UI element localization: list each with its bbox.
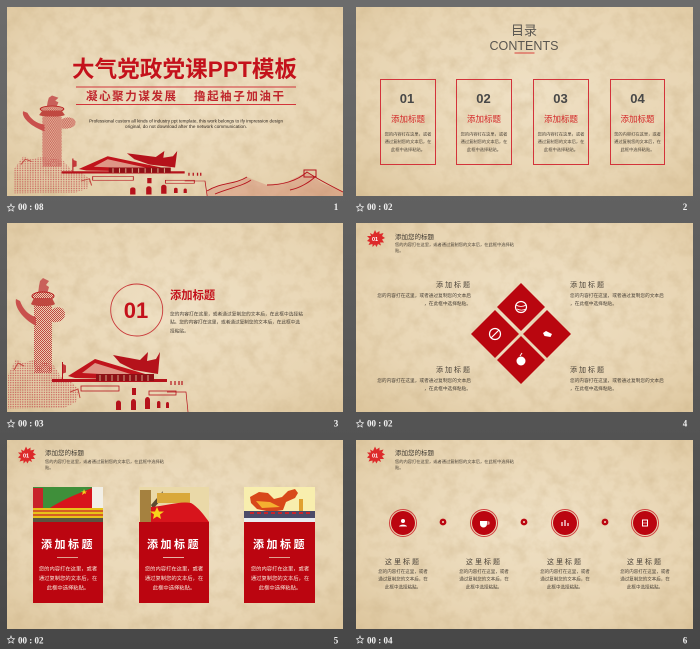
connector dot 2 <box>521 519 527 525</box>
section body text <box>170 310 303 334</box>
paper background <box>7 440 343 629</box>
card text: 通过复制您的文本后，在 <box>145 574 203 582</box>
card 2 <box>139 487 209 603</box>
timeline node 4: calendar icon <box>632 510 658 536</box>
footer 4: 00 : 02 <box>367 418 393 428</box>
card text: 您的内容打在这里，或者 <box>251 564 309 572</box>
text block top left: 您的内容打在这里，或者通过复制您的文本后 <box>377 292 471 299</box>
card 1 <box>33 487 103 603</box>
header text <box>395 232 515 254</box>
timeline node 2: cup icon <box>470 510 498 536</box>
section heading: 添加标题 <box>170 288 215 302</box>
footer 1 <box>8 202 339 212</box>
text block 4: 通过复制您的文本后，在 <box>620 576 670 582</box>
header badge: 01 <box>23 454 29 460</box>
photo: map of China and crowd <box>244 487 315 522</box>
text block top left: ，在此框中选择粘贴。 <box>424 300 471 307</box>
text block 1 <box>378 557 428 590</box>
footer 2 <box>356 202 688 212</box>
text block 1: 您的内容打在这里，或者 <box>378 568 428 575</box>
footer 2: 2 <box>683 202 688 212</box>
diamond top: ball icon <box>497 283 545 331</box>
footer 1: 00 : 08 <box>18 202 44 212</box>
paper background <box>356 440 693 629</box>
card 03: 添加标题 <box>544 114 578 124</box>
section body text: 择粘贴。 <box>170 328 189 334</box>
card 04: 添加标题 <box>620 114 655 124</box>
card 04 <box>610 80 664 164</box>
slide 1: cover <box>7 7 343 212</box>
subtitle band <box>76 87 296 104</box>
text block 3 <box>540 557 590 590</box>
footer 6: 6 <box>683 636 688 646</box>
paper background <box>7 223 343 412</box>
card 04: 通过复制您的文本后，在 <box>614 138 661 145</box>
card text <box>39 564 97 592</box>
header text: 贴。 <box>45 464 54 471</box>
text block bottom left <box>377 365 472 392</box>
text block top right <box>570 280 664 307</box>
footer 5: 00 : 02 <box>18 636 44 646</box>
card text: 通过复制您的文本后，在 <box>251 574 309 582</box>
text block bottom left: 您的内容打在这里，或者通过复制您的文本后 <box>377 377 471 384</box>
card text <box>251 564 309 592</box>
text block 1: 此框中选择粘贴。 <box>385 584 421 590</box>
card 03: 此框中选择粘贴。 <box>544 146 578 153</box>
divider <box>269 556 290 559</box>
timeline node 1: person icon <box>390 510 416 536</box>
slide 5: three photo cards <box>7 440 343 646</box>
text block top left: 添加标题 <box>436 280 472 289</box>
header badge <box>367 230 385 247</box>
card 03: 您的内容打在这里，或者 <box>538 130 585 138</box>
text block 2 <box>459 557 509 590</box>
footer 2: 00 : 02 <box>367 202 393 212</box>
footer 4: 4 <box>683 418 688 428</box>
text block 1: 通过复制您的文本后，在 <box>378 576 428 582</box>
header badge: 01 <box>372 237 378 243</box>
footer 6 <box>356 636 688 646</box>
diamond left: no-symbol icon <box>471 310 519 358</box>
section body text: 您的内容打在这里，或者通过复制您的文本后，在此框中选择粘 <box>170 310 303 318</box>
card text: 通过复制您的文本后，在 <box>39 574 97 582</box>
footer 6: 00 : 04 <box>367 636 393 646</box>
card 02 <box>456 80 512 164</box>
header text: 添加您的标题 <box>45 448 84 457</box>
header badge <box>367 446 385 464</box>
header text <box>395 448 515 471</box>
text block 4: 这里标题 <box>627 557 663 566</box>
card title: 添加标题 <box>253 537 307 551</box>
slide 2: contents <box>356 7 693 212</box>
contents heading <box>490 23 558 54</box>
slide 6: timeline <box>356 440 693 646</box>
text block bottom right: ，在此框中选择粘贴。 <box>570 385 617 392</box>
text block bottom right: 您的内容打在这里，或者通过复制您的文本后 <box>570 377 664 384</box>
card 01: 01 <box>400 91 414 106</box>
card 03: 03 <box>553 91 568 106</box>
red panel <box>33 522 103 603</box>
card 3 <box>244 487 315 603</box>
card 02: 您的内容打在这里，或者 <box>461 130 508 138</box>
card 03: 通过复制您的文本后，在 <box>538 138 584 145</box>
english description: original, do not download after the network communication. <box>125 124 247 129</box>
diamond right: bottle icon <box>523 310 571 358</box>
header text: 您的内容打在这里，或者通过复制您的文本后，在此框中选择粘 <box>395 458 515 465</box>
photo: column, gate and flag <box>139 487 209 522</box>
text block 2: 您的内容打在这里，或者 <box>459 568 509 575</box>
text block 2: 这里标题 <box>466 557 502 566</box>
footer 5: 5 <box>334 636 339 646</box>
card text: 您的内容打在这里，或者 <box>39 564 97 572</box>
english description: Professional custom all kinds of industry ppt template, this work belongs to ify impression design <box>89 118 283 124</box>
text block bottom left: ，在此框中选择粘贴。 <box>424 385 471 392</box>
text block top right: 添加标题 <box>570 280 606 289</box>
card text <box>145 564 203 592</box>
card 01 <box>380 80 436 164</box>
text block 3: 您的内容打在这里，或者 <box>540 568 590 575</box>
card 04: 此框中选择粘贴。 <box>620 146 655 153</box>
subtitle band: 撸起袖子加油干 <box>194 89 284 103</box>
card 04: 04 <box>630 91 645 106</box>
card 03 <box>534 80 588 164</box>
header text: 添加您的标题 <box>395 232 434 241</box>
text block 3: 此框中选择粘贴。 <box>547 584 583 590</box>
slide 3: section divider <box>7 223 343 428</box>
card 04: 您的内容打在这里，或者 <box>614 130 662 138</box>
footer 3 <box>8 418 339 428</box>
text block 4 <box>620 557 670 590</box>
header text: 贴。 <box>395 464 404 471</box>
card 01: 添加标题 <box>391 114 425 124</box>
text block bottom right: 添加标题 <box>570 365 606 374</box>
diamond bottom: apple icon <box>497 336 545 384</box>
card text: 此框中选择粘贴。 <box>153 584 195 592</box>
card text: 您的内容打在这里，或者 <box>145 564 203 572</box>
contents heading: 目录 <box>511 23 537 38</box>
connector dot 1 <box>440 519 446 525</box>
header text: 您的内容打在这里，或者通过复制您的文本后，在此框中选择粘 <box>45 458 165 465</box>
divider <box>57 556 78 559</box>
paper background <box>7 7 343 196</box>
text block top left <box>377 280 472 307</box>
card 02: 添加标题 <box>467 114 501 124</box>
footer 3: 00 : 03 <box>18 418 44 428</box>
title: 大气党政党课PPT模板 <box>72 57 297 82</box>
text block bottom right <box>570 365 664 392</box>
slide 4: diamond layout <box>356 223 693 428</box>
text block top right: 您的内容打在这里，或者通过复制您的文本后 <box>570 292 664 299</box>
card 02: 通过复制您的文本后，在 <box>461 138 507 145</box>
card title: 添加标题 <box>41 537 95 551</box>
section number circle <box>111 284 163 336</box>
red panel <box>139 522 209 603</box>
card 02: 此框中选择粘贴。 <box>467 146 501 153</box>
timeline node 3: chart icon <box>552 510 578 536</box>
card text: 此框中选择粘贴。 <box>47 584 89 592</box>
photo: flag and parade <box>33 487 103 522</box>
header text: 您的内容打在这里，或者通过复制您的文本后，在此框中选择粘 <box>395 241 515 248</box>
text block 2: 通过复制您的文本后，在 <box>459 576 509 582</box>
card 01: 此框中选择粘贴。 <box>391 146 425 153</box>
subtitle band: 凝心聚力谋发展 <box>86 89 176 103</box>
text block bottom left: 添加标题 <box>436 365 472 374</box>
footer 3: 3 <box>334 418 339 428</box>
text block 3: 通过复制您的文本后，在 <box>540 576 590 582</box>
footer 4 <box>356 418 688 428</box>
text block 4: 此框中选择粘贴。 <box>627 584 663 590</box>
english description <box>89 118 283 129</box>
card 01: 您的内容打在这里，或者 <box>385 130 432 138</box>
text block 2: 此框中选择粘贴。 <box>466 584 502 590</box>
footer 1: 1 <box>334 202 339 212</box>
divider <box>163 556 184 559</box>
section number circle: 01 <box>124 298 148 323</box>
paper background <box>356 7 693 196</box>
footer 5 <box>8 636 339 646</box>
connector dot 3 <box>602 519 608 525</box>
text block 1: 这里标题 <box>385 557 421 566</box>
card 02: 02 <box>476 91 491 106</box>
header text <box>45 448 165 471</box>
header badge <box>18 446 36 464</box>
red panel <box>244 522 315 603</box>
diamond group <box>471 283 571 384</box>
card 01: 通过复制您的文本后，在 <box>385 138 431 145</box>
header text: 添加您的标题 <box>395 448 434 457</box>
paper background <box>356 223 693 412</box>
text block top right: ，在此框中选择粘贴。 <box>570 300 617 307</box>
card text: 此框中选择粘贴。 <box>259 584 301 592</box>
text block 3: 这里标题 <box>547 557 583 566</box>
section body text: 贴。您的内容打在这里，或者通过复制您的文本后，在此框中选 <box>170 318 300 326</box>
text block 4: 您的内容打在这里，或者 <box>620 568 670 575</box>
contents heading: CONTENTS <box>490 39 558 53</box>
illustration: monument, gate tower and great wall <box>15 96 343 196</box>
header text: 贴。 <box>395 247 404 254</box>
card title: 添加标题 <box>147 537 201 551</box>
illustration: monument and gate tower <box>8 278 188 412</box>
header badge: 01 <box>372 454 378 460</box>
